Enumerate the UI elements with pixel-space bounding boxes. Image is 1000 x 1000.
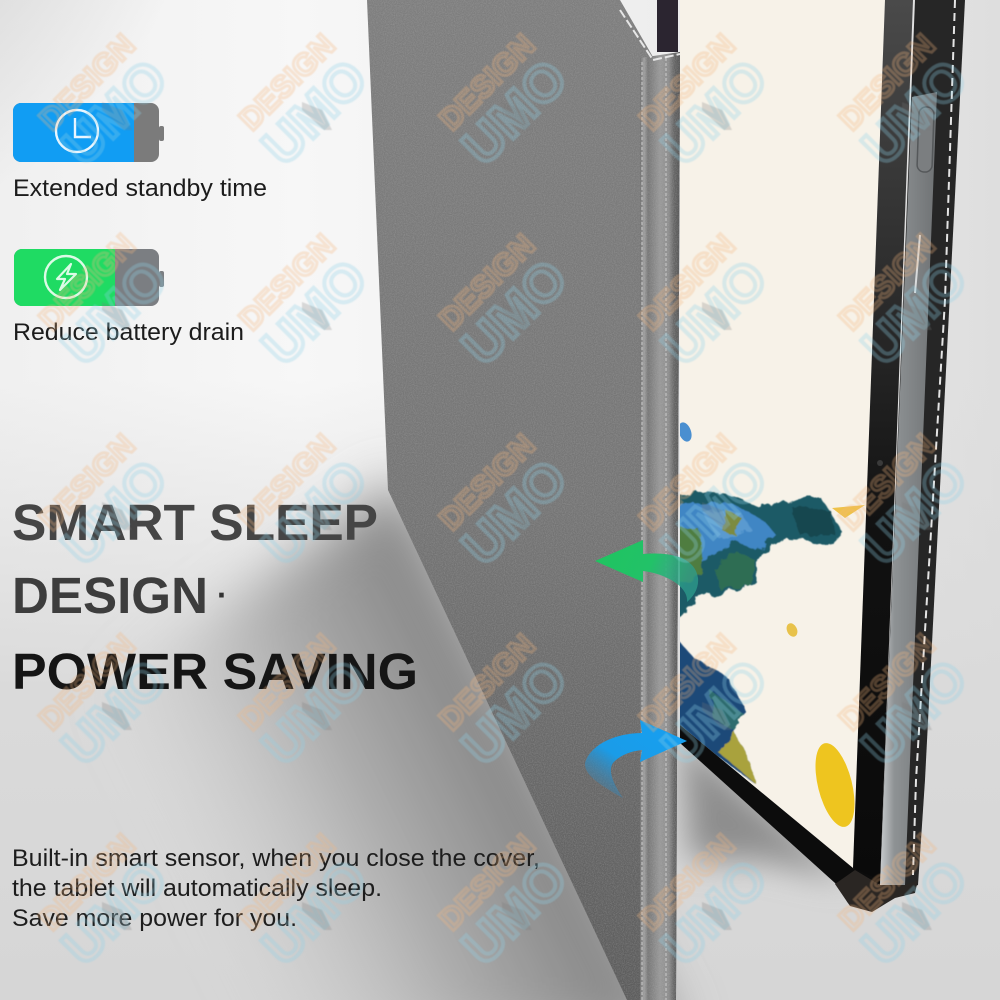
watermark: repeated tiled logo: DESIGN [632,427,742,537]
watermark: repeated tiled logo: DESIGN [32,27,142,137]
body copy: the tablet will automatically sleep. [12,875,382,902]
watermark: repeated tiled logo: UMO [51,49,179,176]
tablet: screen and side frame [672,0,965,912]
watermark: repeated tiled logo: DESIGN [32,227,142,337]
watermark: repeated tiled logo: UMO [451,649,579,776]
watermark: repeated tiled logo: DESIGN [432,427,542,537]
watermark: repeated tiled logo: DESIGN [232,827,342,937]
notch: inner pocket at top of spine [657,0,678,52]
watermark: repeated tiled logo: UMO [651,849,779,976]
watermark: repeated tiled logo: DESIGN [632,27,742,137]
icon: green curved arrow (cover opening) [595,540,698,602]
icon: blue battery with clock [13,103,164,162]
watermark: repeated tiled logo: UMO [451,249,579,376]
watermark: repeated tiled logo: DESIGN [832,427,942,537]
body copy [12,845,540,932]
watermark: repeated tiled logo: UMO [51,449,179,576]
watermark: repeated tiled logo: UMO [851,49,979,176]
watermark: repeated tiled logo: DESIGN [432,27,542,137]
volume slit [915,235,920,293]
watermark: repeated tiled logo: UMO [851,649,979,776]
body copy: Built-in smart sensor, when you close the cover, [12,845,540,872]
watermark: repeated tiled logo: DESIGN [232,627,342,737]
heading: smart sleep design, power saving: DESIGN [12,567,208,624]
watermark: repeated tiled logo: UMO [251,849,379,976]
watermark: repeated tiled logo: UMO [251,49,379,176]
watermark: repeated tiled logo: DESIGN [632,827,742,937]
watermark: repeated tiled logo: DESIGN [832,227,942,337]
watermark: repeated tiled logo: UMO [451,449,579,576]
watermark: repeated tiled logo: DESIGN [32,427,142,537]
watermark: repeated tiled logo: UMO [851,449,979,576]
outer dark case strip with stitching [880,0,965,895]
watermark: repeated tiled logo: UMO [251,249,379,376]
silver tablet edge [880,92,937,885]
watermark: repeated tiled logo: UMO [651,449,779,576]
icon: green battery with bolt [14,249,164,306]
fabric grain [367,0,680,1000]
watercolour artwork on screen [672,421,865,831]
power button [917,107,934,172]
camera hole [877,460,883,466]
body copy: Save more power for you. [12,905,297,932]
watermark: repeated tiled logo: UMO [651,649,779,776]
fabric folio cover [367,0,680,1000]
stitching line [913,0,955,875]
heading: smart sleep design, power saving [12,494,418,700]
watermark: repeated tiled logo: UMO [51,849,179,976]
watermark: repeated tiled logo: UMO [451,849,579,976]
top edge stitching [620,10,680,60]
watermark: repeated tiled logo: DESIGN [432,227,542,337]
black screen bezel [853,0,913,885]
label: reduce battery drain: Reduce battery drain [13,319,244,346]
watermark: repeated tiled logo: DESIGN [632,627,742,737]
watermark: repeated tiled logo: UMO [651,49,779,176]
watermark: repeated tiled logo: DESIGN [832,627,942,737]
heading: smart sleep design, power saving: POWER SAVING [12,643,418,700]
heading: smart sleep design, power saving: SMART SLEEP [12,494,378,551]
icon: blue curved arrow (cover closing) [585,720,687,798]
watermark: repeated tiled logo: DESIGN [232,427,342,537]
watermark: repeated tiled logo: UMO [51,249,179,376]
watermark: repeated tiled logo: UMO [51,649,179,776]
watermark: repeated tiled logo: DESIGN [632,227,742,337]
watermark: repeated tiled logo: UMO [251,449,379,576]
watermark: repeated tiled logo: DESIGN [32,827,142,937]
watermark: repeated tiled logo: UMO [451,49,579,176]
watermark: repeated tiled logo: UMO [651,249,779,376]
watermark: repeated tiled logo: UMO [851,849,979,976]
watermark: repeated tiled logo: DESIGN [232,27,342,137]
case corner [835,870,918,912]
label: extended standby time: Extended standby time [13,175,267,202]
watermark: repeated tiled logo: DESIGN [32,627,142,737]
heading: smart sleep design, power saving: · [217,577,228,613]
watermark: repeated tiled logo: UMO [251,649,379,776]
watermark: repeated tiled logo: DESIGN [832,827,942,937]
watermark: repeated tiled logo: DESIGN [432,627,542,737]
watermark: repeated tiled logo: DESIGN [432,827,542,937]
watermark: repeated tiled logo: DESIGN [832,27,942,137]
cover spine [640,52,680,1000]
watermark: repeated tiled logo: UMO [851,249,979,376]
spine stitching [642,58,666,1000]
tablet screen [680,0,885,868]
watermark: repeated tiled logo: DESIGN [232,227,342,337]
bottom black bezel [680,725,880,906]
